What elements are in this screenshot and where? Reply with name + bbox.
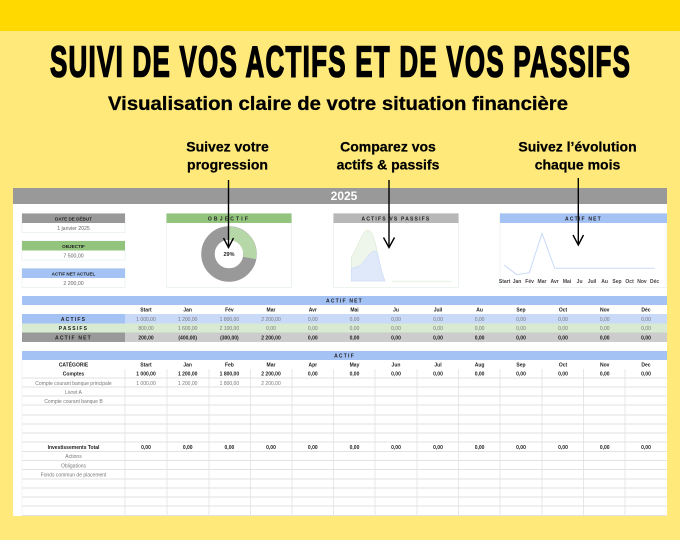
callout: evolution [518, 138, 637, 172]
table: actif net values: 0,00 [516, 335, 526, 341]
table: investissements total row: 0,00 [183, 445, 193, 451]
table: actif net month headers: Mar [267, 308, 275, 314]
table: investissements total row: 0,00 [475, 445, 485, 451]
table: compte courant row: 1 200,00 [178, 381, 198, 387]
table: actif net month headers: Fév [225, 308, 234, 314]
table: actif net: PASSIFS [59, 326, 88, 332]
table: compte courant row [35, 381, 281, 387]
table: actifs values: 0,00 [391, 317, 401, 323]
table: actif month headers: Jun [392, 362, 400, 368]
info box: objectif: 7 500,00 [63, 253, 84, 259]
table: actifs values: 0,00 [308, 317, 318, 323]
table: actifs values: 1 800,00 [220, 317, 239, 323]
callout: actifs et passifs: actifs & passifs [337, 156, 440, 172]
info box: date de debut: 1 janvier 2025 [57, 226, 90, 232]
table: actifs values: 0,00 [475, 317, 485, 323]
callout: evolution: Suivez l’évolution [518, 138, 637, 154]
panel: objectif donut: OBJECTIF [208, 216, 250, 222]
table: investment labels [41, 454, 107, 479]
table: passifs values: 1 600,00 [178, 326, 198, 332]
table: actif net month headers: Juil [434, 308, 443, 314]
panel: actifs vs passifs chart: ACTIFS VS PASSIFS [362, 216, 430, 222]
table: comptes total row: 0,00 [558, 372, 568, 378]
panel: objectif donut [166, 214, 292, 288]
table: actif [22, 351, 667, 516]
panel: actif net line chart: Fév [525, 279, 534, 285]
table: comptes total row: 0,00 [350, 372, 360, 378]
info box: objectif [22, 241, 125, 260]
table: actif net: ACTIF NET [55, 335, 92, 341]
panel: actif net line chart: Au [601, 279, 608, 285]
table: actif net month headers [140, 308, 651, 314]
table: investissements total row: 0,00 [350, 445, 360, 451]
table: actifs values: 0,00 [516, 317, 526, 323]
table: actif net values: (300,00) [220, 335, 239, 341]
arrow: to line chart [573, 178, 584, 245]
table: actif net values: 0,00 [558, 335, 568, 341]
table: investissements total row: 0,00 [641, 445, 651, 451]
table: actif month headers: Oct [559, 362, 567, 368]
table: actif net [22, 296, 667, 342]
table: actif net values: 0,00 [641, 335, 651, 341]
panel: actif net line chart [499, 214, 667, 288]
table: actif net values: 0,00 [475, 335, 485, 341]
table: actifs values: 1 200,00 [178, 317, 198, 323]
table: investment labels: Obligations [61, 464, 87, 470]
table: actif month headers [59, 360, 651, 368]
table: comptes total row: 1 000,00 [136, 372, 156, 378]
top band [0, 0, 680, 31]
subtitle: Visualisation claire de votre situation financière [108, 93, 568, 115]
table: comptes total row: Comptes [63, 372, 84, 378]
panel: actif net line chart: Déc [650, 279, 659, 285]
table: comptes total row: 0,00 [475, 372, 485, 378]
table: investissements total row: 0,00 [225, 445, 234, 451]
table: passifs values: 0,00 [558, 326, 568, 332]
table: compte courant row: 1 000,00 [136, 381, 156, 387]
table: passifs values [138, 326, 651, 332]
table: actifs values: 0,00 [558, 317, 568, 323]
table: passifs values: 2 100,00 [220, 326, 239, 332]
info box: actif net actuel: ACTIF NET ACTUEL [52, 271, 96, 276]
callout: progression [186, 138, 269, 172]
table: actif month headers: Sep [516, 362, 526, 368]
table: compte courant row: 2 200,00 [261, 381, 281, 387]
year header: 2025 [331, 189, 358, 203]
arrow: to area chart [384, 180, 394, 248]
info box: actif net actuel: 2 200,00 [63, 281, 84, 287]
table: investissements total row: 0,00 [391, 445, 401, 451]
table: investissements total row: 0,00 [308, 445, 318, 451]
table: actif month headers: Jan [183, 362, 192, 368]
table: comptes total row: 1 800,00 [220, 372, 239, 378]
panel: actif net line chart: Start [499, 279, 511, 285]
table: actif net values: 2 200,00 [261, 335, 281, 341]
panel: actif net line chart: Ju [577, 279, 583, 285]
table: passifs values: 0,00 [266, 326, 276, 332]
info box: objectif: OBJECTIF [62, 244, 85, 249]
table: actif net values: 0,00 [600, 335, 610, 341]
panel: actif net line chart: Sep [612, 279, 622, 285]
table: actif net values: 0,00 [391, 335, 401, 341]
dashboard panel [13, 188, 667, 516]
table: actif net values [138, 335, 651, 341]
table: actif month headers: May [350, 362, 360, 368]
table: actif net month headers: Avr [309, 308, 317, 314]
table: comptes total row: 2 200,00 [261, 372, 281, 378]
table: passifs values: 0,00 [391, 326, 401, 332]
table: actif month headers: CATÉGORIE [59, 360, 89, 368]
table: actif net values: 0,00 [308, 335, 318, 341]
table: investissements total row: Investissements Total [48, 445, 100, 451]
table: passifs values: 0,00 [433, 326, 443, 332]
table: comptes total row: 0,00 [308, 372, 318, 378]
panel: actif net line chart: Mar [538, 279, 546, 285]
table: investment labels: Fonds commun de placement [41, 473, 107, 479]
table: actif net values: 0,00 [433, 335, 443, 341]
table: actifs values: 1 000,00 [136, 317, 156, 323]
panel: actif net line chart: Jan [513, 279, 521, 285]
table: actif net values: 200,00 [138, 335, 154, 341]
table: actifs values: 2 200,00 [261, 317, 281, 323]
table: actif net: ACTIFS [61, 317, 86, 323]
table: actif net month headers: Au [476, 308, 483, 314]
table: passifs values: 0,00 [641, 326, 651, 332]
panel: actif net line chart: Mai [563, 279, 572, 285]
table: comptes total row: 0,00 [516, 372, 526, 378]
table: passifs values: 0,00 [308, 326, 318, 332]
panel: actif net line chart: Nov [637, 279, 647, 285]
table: account labels: Livret A [65, 390, 82, 396]
table: comptes total row: 1 200,00 [178, 372, 198, 378]
table: actif month headers: Dec [641, 362, 651, 368]
table: actif net month headers: Déc [641, 308, 651, 314]
table: investissements total row: 0,00 [141, 445, 151, 451]
table: comptes total row [63, 372, 651, 378]
table: passifs values: 0,00 [475, 326, 485, 332]
table: actifs values [136, 317, 651, 323]
panel: objectif donut: 29% [223, 252, 235, 258]
table: passifs values: 0,00 [600, 326, 610, 332]
table: actif net values: 0,00 [350, 335, 360, 341]
callout: actifs et passifs [337, 138, 440, 172]
callout: progression: Suivez votre [186, 138, 269, 154]
table: actif month headers: Feb [225, 362, 234, 368]
table: compte courant row: 1 800,00 [220, 381, 239, 387]
table: investissements total row: 0,00 [558, 445, 568, 451]
callout: actifs et passifs: Comparez vos [340, 138, 436, 154]
table: actif month headers: Aug [475, 362, 484, 368]
table: passifs values: 800,00 [138, 326, 154, 332]
panel: actif net line chart: Oct [625, 279, 634, 285]
callout: progression: progression [187, 156, 268, 172]
table: actif net values: (400,00) [178, 335, 197, 341]
table: comptes total row: 0,00 [641, 372, 651, 378]
table: actif net month headers: Sep [516, 308, 526, 314]
table: investissements total row: 0,00 [266, 445, 276, 451]
arrow: to donut [224, 180, 234, 248]
panel: actif net line chart: ACTIF NET [565, 216, 602, 222]
table: compte courant row: Compte courant banque principale [35, 381, 112, 387]
table: investissements total row [48, 445, 651, 451]
table: actif month headers: Nov [600, 362, 610, 368]
year header [13, 188, 667, 204]
table: investissements total row: 0,00 [433, 445, 443, 451]
table: investissements total row: 0,00 [516, 445, 526, 451]
table: comptes total row: 0,00 [391, 372, 401, 378]
callout: evolution: chaque mois [535, 156, 620, 172]
table: actif month headers: Jul [434, 362, 442, 368]
panel: actif net line chart: Juil [588, 279, 597, 285]
table: actif: ACTIF [334, 353, 355, 359]
panel: actif net line chart: Avr [551, 279, 559, 285]
table: actifs values: 0,00 [433, 317, 443, 323]
table: actifs values: 0,00 [350, 317, 360, 323]
table: actifs values: 0,00 [641, 317, 651, 323]
table: comptes total row: 0,00 [433, 372, 443, 378]
table: investissements total row: 0,00 [600, 445, 610, 451]
info box: date de debut [22, 214, 125, 232]
table: actif net month headers: Ju [393, 308, 399, 314]
table: actif net month headers: Start [140, 308, 152, 314]
panel: actifs vs passifs chart [334, 214, 458, 288]
table: actif net month headers: Nov [600, 308, 610, 314]
info box: date de debut: DATE DE DÉBUT [55, 214, 92, 221]
table: account labels: Compte courant banque B [44, 399, 103, 405]
info box: actif net actuel [22, 268, 125, 288]
table: passifs values: 0,00 [350, 326, 360, 332]
table: actif net: ACTIF NET [326, 298, 363, 304]
table: actif month headers: Mar [267, 362, 275, 368]
table: investment labels: Actions [65, 454, 82, 460]
table: actifs values: 0,00 [600, 317, 610, 323]
table: account labels [44, 390, 103, 405]
table: actif month headers: Apr [308, 362, 317, 368]
title: SUIVI DE VOS ACTIFS ET DE VOS PASSIFS [50, 36, 630, 86]
table: comptes total row: 0,00 [600, 372, 610, 378]
table: actif net month headers: Mai [350, 308, 359, 314]
table: actif net month headers: Jan [183, 308, 192, 314]
table: passifs values: 0,00 [516, 326, 526, 332]
table: actif net month headers: Oct [559, 308, 567, 314]
table: actif month headers: Start [140, 362, 152, 368]
